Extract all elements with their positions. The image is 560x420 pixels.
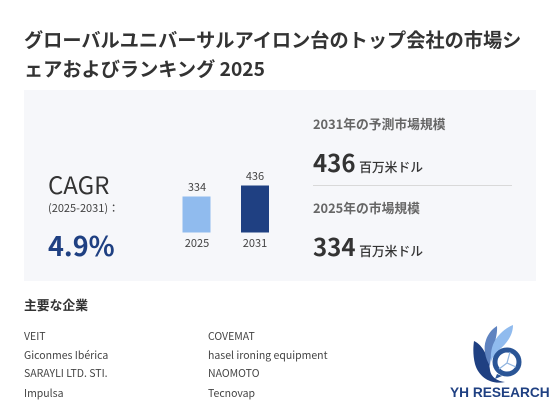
forecast heading 2031: 2031年の予測市場規模 <box>313 114 446 133</box>
bar 2025 <box>182 179 210 251</box>
company list: column 2: hasel ironing equipment <box>208 348 328 363</box>
company list: column 2: NAOMOTO <box>208 366 259 381</box>
company list: column 1 <box>24 329 108 401</box>
company list: column 2: COVEMAT <box>208 329 255 344</box>
bar 2025: 2025 <box>185 235 209 251</box>
bar 2031 <box>241 168 269 251</box>
CAGR period: (2025-2031)： <box>48 200 119 216</box>
company list: column 1: VEIT <box>24 329 46 344</box>
panel: market summary <box>24 90 536 281</box>
bar chart <box>182 170 269 251</box>
title: グローバルユニバーサルアイロン台のトップ会社の市場シェアおよびランキング 2025 <box>24 25 521 82</box>
company list: column 1: SARAYLI LTD. STI. <box>24 366 108 381</box>
logo text: YH RESEARCH <box>450 385 550 400</box>
market value 2025: 334 百万米ドル <box>313 228 423 263</box>
forecast value 2031: 436 百万米ドル <box>313 144 423 179</box>
bar 2031: 2031 <box>243 235 267 251</box>
logo mark <box>473 325 522 383</box>
bar 2025: 334 <box>188 179 206 195</box>
company list: column 1: Impulsa <box>24 386 64 401</box>
company list: column 2: Tecnovap <box>208 386 255 401</box>
logo: YH Research <box>450 325 550 400</box>
CAGR value: 4.9% <box>48 225 115 264</box>
company list: column 1: Giconmes Ibérica <box>24 348 108 363</box>
CAGR label: CAGR <box>48 166 109 201</box>
market heading 2025: 2025年の市場規模 <box>313 198 420 217</box>
company list: column 2 <box>208 329 328 401</box>
divider <box>313 185 512 186</box>
companies heading: 主要な企業 <box>24 295 88 314</box>
